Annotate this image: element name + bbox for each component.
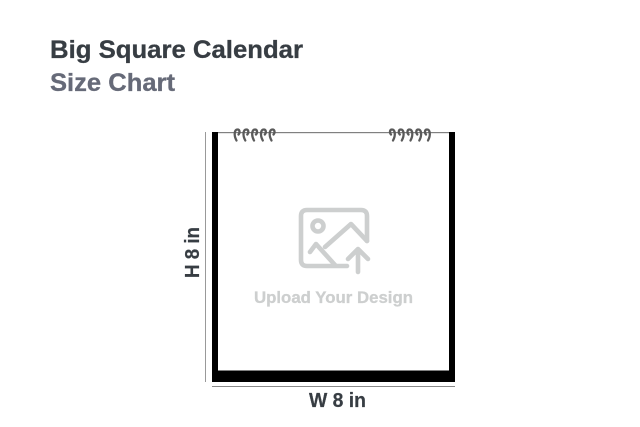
title: Big Square Calendar — [50, 36, 303, 64]
width dimension line — [212, 386, 455, 388]
subtitle: Size Chart — [50, 69, 176, 97]
height label: H 8 in — [182, 227, 204, 278]
width label: W 8 in — [309, 390, 366, 412]
upload label: Upload Your Design — [254, 288, 413, 307]
height dimension line — [204, 132, 206, 382]
icon: image upload — [301, 210, 368, 272]
spiral binding right — [390, 130, 430, 140]
calendar — [212, 130, 455, 382]
calendar frame — [212, 132, 455, 382]
spiral binding left — [235, 130, 275, 140]
